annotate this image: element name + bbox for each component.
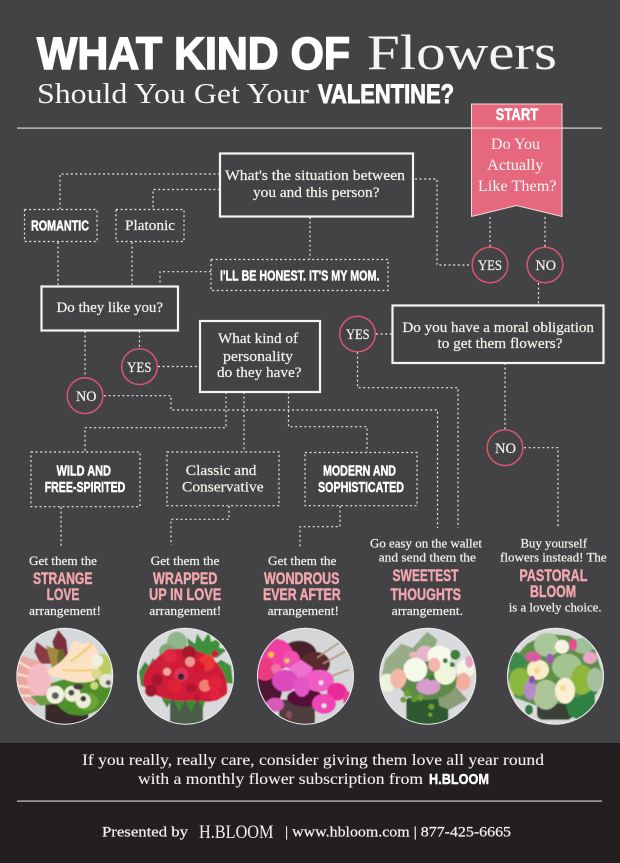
result: pastoral bloom: BLOOM xyxy=(530,582,576,601)
title: Should You Get Your xyxy=(37,78,309,110)
subscription message: H.BLOOM xyxy=(429,771,489,788)
header rule xyxy=(17,128,602,129)
node: no moral xyxy=(487,430,523,466)
flowchart connector lines xyxy=(58,174,558,548)
node: yes likes you xyxy=(122,349,157,385)
subscription message: If you really, really care, consider giving them love all year round xyxy=(82,752,544,769)
result: pastoral bloom: flowers instead! The xyxy=(500,550,607,565)
presented by line: Presented by xyxy=(102,825,189,841)
result: pastoral bloom: PASTORAL xyxy=(519,566,587,585)
box: personality question: What kind of xyxy=(218,331,298,347)
answer: modern and sophisticated: SOPHISTICATED xyxy=(318,479,404,496)
node: no top xyxy=(527,247,563,283)
node: yes top: YES xyxy=(478,258,502,274)
result: strange love xyxy=(29,553,101,618)
box: do they like you: Do they like you? xyxy=(56,300,163,316)
result: pastoral bloom xyxy=(500,536,607,615)
photo: sweetest thoughts bouquet xyxy=(378,628,476,725)
presented by line xyxy=(102,822,511,843)
answer: wild and free-spirited xyxy=(31,452,140,507)
node: no likes you: NO xyxy=(76,389,96,405)
title: Flowers xyxy=(367,24,557,80)
node: yes likes you: YES xyxy=(127,360,151,376)
result: wrapped up in love xyxy=(149,553,221,618)
result: sweetest thoughts: SWEETEST xyxy=(392,566,459,585)
start ribbon: Actually xyxy=(487,157,544,174)
answer: modern and sophisticated xyxy=(305,452,417,506)
presented by line: H.BLOOM xyxy=(199,822,274,843)
node: no likes you xyxy=(67,378,103,414)
answer: romantic: ROMANTIC xyxy=(31,218,89,234)
result: wondrous ever after xyxy=(263,553,341,618)
box: situation question: you and this person? xyxy=(253,185,380,201)
answer: classic and conservative xyxy=(167,452,279,506)
start ribbon xyxy=(472,104,562,216)
result: sweetest thoughts: arrangement. xyxy=(392,603,463,618)
box: do they like you xyxy=(42,286,178,330)
answer: modern and sophisticated: MODERN AND xyxy=(323,462,396,480)
result: wrapped up in love: WRAPPED xyxy=(153,569,217,588)
box: situation question xyxy=(220,154,413,216)
node: yes top xyxy=(472,247,508,283)
result: pastoral bloom: Buy yourself xyxy=(520,536,588,551)
answer: honest mom: I'LL BE HONEST. IT'S MY MOM. xyxy=(220,268,380,284)
answer: platonic xyxy=(116,210,184,242)
box: moral obligation: Do you have a moral obligation xyxy=(402,320,595,336)
result: sweetest thoughts: and send them the xyxy=(379,550,476,565)
photo: wrapped up in love bouquet xyxy=(137,628,234,725)
answer: platonic: Platonic xyxy=(125,218,175,234)
node: yes moral xyxy=(340,316,375,352)
box: situation question: What's the situation between xyxy=(225,168,406,184)
answer: classic and conservative: Classic and xyxy=(186,463,257,479)
result: sweetest thoughts xyxy=(370,536,482,618)
box: personality question: do they have? xyxy=(217,365,302,381)
result: strange love: arrangement! xyxy=(29,603,101,618)
subscription message xyxy=(82,752,544,788)
result: wondrous ever after: EVER AFTER xyxy=(263,585,341,604)
answer: classic and conservative: Conservative xyxy=(182,480,264,496)
result: wondrous ever after: Get them the xyxy=(268,553,337,568)
footer band xyxy=(0,743,620,863)
node: no top: NO xyxy=(536,258,556,274)
title: WHAT KIND OF xyxy=(37,28,350,79)
subscription message: with a monthly flower subscription from xyxy=(138,771,423,788)
result: sweetest thoughts: Go easy on the wallet xyxy=(370,536,482,551)
answer: wild and free-spirited: FREE-SPIRITED xyxy=(45,479,125,496)
result: wrapped up in love: arrangement! xyxy=(149,603,221,618)
result: wondrous ever after: arrangement! xyxy=(268,603,339,618)
box: moral obligation xyxy=(392,306,604,363)
result: strange love: STRANGE xyxy=(33,569,92,588)
node: yes moral: YES xyxy=(346,327,370,343)
result: wrapped up in love: Get them the xyxy=(151,553,220,568)
box: personality question xyxy=(200,321,320,392)
result: strange love: LOVE xyxy=(47,585,79,604)
result: sweetest thoughts: THOUGHTS xyxy=(390,585,461,604)
result: wondrous ever after: WONDROUS xyxy=(264,569,340,588)
box: moral obligation: to get them flowers? xyxy=(438,336,562,352)
title: VALENTINE? xyxy=(318,79,454,109)
start ribbon: Do You xyxy=(491,136,540,153)
node: no moral: NO xyxy=(495,441,516,457)
answer: romantic xyxy=(24,210,97,242)
box: personality question: personality xyxy=(223,349,294,365)
presented by line: | www.hbloom.com | 877-425-6665 xyxy=(285,825,511,841)
answer: wild and free-spirited: WILD AND xyxy=(56,462,111,480)
photo: pastoral bloom bouquet xyxy=(507,628,604,725)
start ribbon: Like Them? xyxy=(478,178,556,195)
answer: honest mom xyxy=(211,260,388,290)
title xyxy=(37,24,557,110)
photo: strange love bouquet xyxy=(16,628,113,726)
result: pastoral bloom: is a lovely choice. xyxy=(509,600,602,615)
photo: wondrous ever after bouquet xyxy=(254,628,354,726)
start ribbon: START xyxy=(496,105,539,124)
result: wrapped up in love: UP IN LOVE xyxy=(149,585,221,604)
result: strange love: Get them the xyxy=(29,553,97,568)
